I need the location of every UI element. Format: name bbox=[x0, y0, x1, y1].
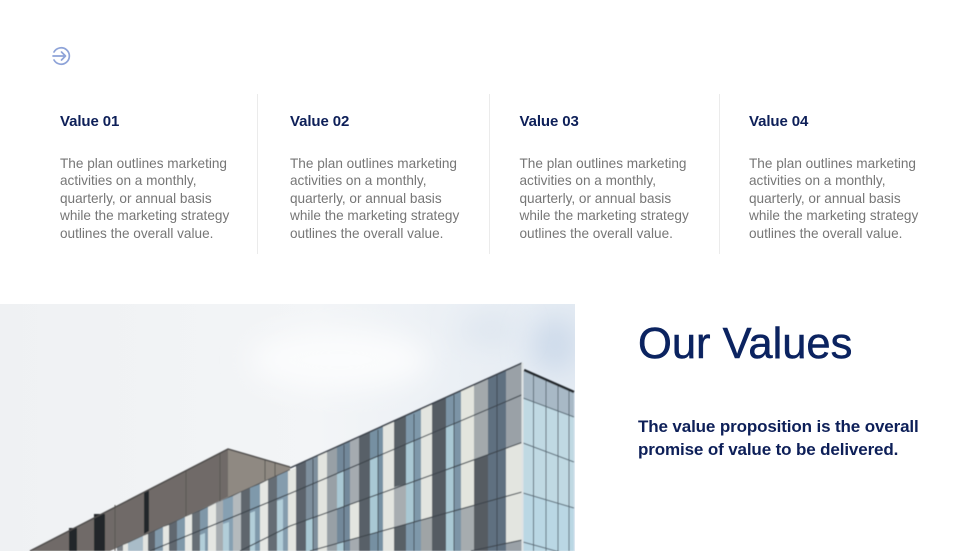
subtitle: promise of value to be delivered. bbox=[638, 440, 898, 459]
subtitle: The value proposition is the overall bbox=[638, 417, 919, 436]
panel: value 01 bbox=[60, 113, 230, 241]
heading: value 04: Value 04 bbox=[749, 113, 808, 130]
floor lines bbox=[150, 363, 522, 551]
text: value 04 description: while the marketing strategy bbox=[749, 208, 918, 223]
window highlights bbox=[306, 424, 454, 551]
icon: arrow in circle bbox=[52, 46, 70, 66]
lower facade windows bbox=[200, 499, 283, 551]
text: value 01 description bbox=[60, 156, 230, 241]
lower building roof band bbox=[30, 449, 228, 551]
text: value 01 description: while the marketing strategy bbox=[60, 208, 229, 223]
lower building facade columns bbox=[117, 545, 123, 551]
per-floor facade variations bbox=[474, 455, 488, 551]
text: value 03 description bbox=[520, 156, 689, 241]
photo: office building against sky bbox=[0, 304, 575, 551]
text: value 03 description: quarterly, or annual basis bbox=[520, 191, 671, 206]
main building facade columns bbox=[296, 461, 306, 551]
text: value 01 description: activities on a monthly, bbox=[60, 173, 197, 188]
text: value 04 description bbox=[749, 156, 918, 241]
text: value 02 description bbox=[290, 156, 460, 241]
panel: value 04 bbox=[749, 113, 918, 241]
title: Our Values bbox=[638, 320, 852, 368]
text: value 04 description: activities on a monthly, bbox=[749, 173, 886, 188]
subtitle bbox=[638, 417, 919, 459]
text: value 04 description: quarterly, or annual basis bbox=[749, 191, 901, 206]
panel: value 02 bbox=[290, 113, 460, 241]
text: value 04 description: outlines the overall value. bbox=[749, 226, 902, 241]
vertical mullions bbox=[313, 375, 497, 551]
text: value 03 description: while the marketing strategy bbox=[520, 208, 689, 223]
text: value 02 description: while the marketing strategy bbox=[290, 208, 459, 223]
text: value 02 description: quarterly, or annual basis bbox=[290, 191, 442, 206]
text: value 01 description: outlines the overall value. bbox=[60, 226, 213, 241]
text: value 01 description: quarterly, or annual basis bbox=[60, 191, 212, 206]
heading: value 02: Value 02 bbox=[290, 113, 349, 130]
heading: value 03: Value 03 bbox=[520, 113, 579, 130]
text: value 04 description: The plan outlines marketing bbox=[749, 156, 916, 171]
glass curtain wall bbox=[523, 371, 574, 551]
panel: value 03 bbox=[520, 113, 689, 241]
text: value 02 description: activities on a monthly, bbox=[290, 173, 427, 188]
text: value 02 description: outlines the overall value. bbox=[290, 226, 443, 241]
text: value 01 description: The plan outlines marketing bbox=[60, 156, 227, 171]
heading: value 01: Value 01 bbox=[60, 113, 119, 130]
text: value 03 description: The plan outlines marketing bbox=[520, 156, 686, 171]
text: value 02 description: The plan outlines marketing bbox=[290, 156, 457, 171]
text: value 03 description: activities on a monthly, bbox=[520, 173, 656, 188]
text: value 03 description: outlines the overall value. bbox=[520, 226, 673, 241]
